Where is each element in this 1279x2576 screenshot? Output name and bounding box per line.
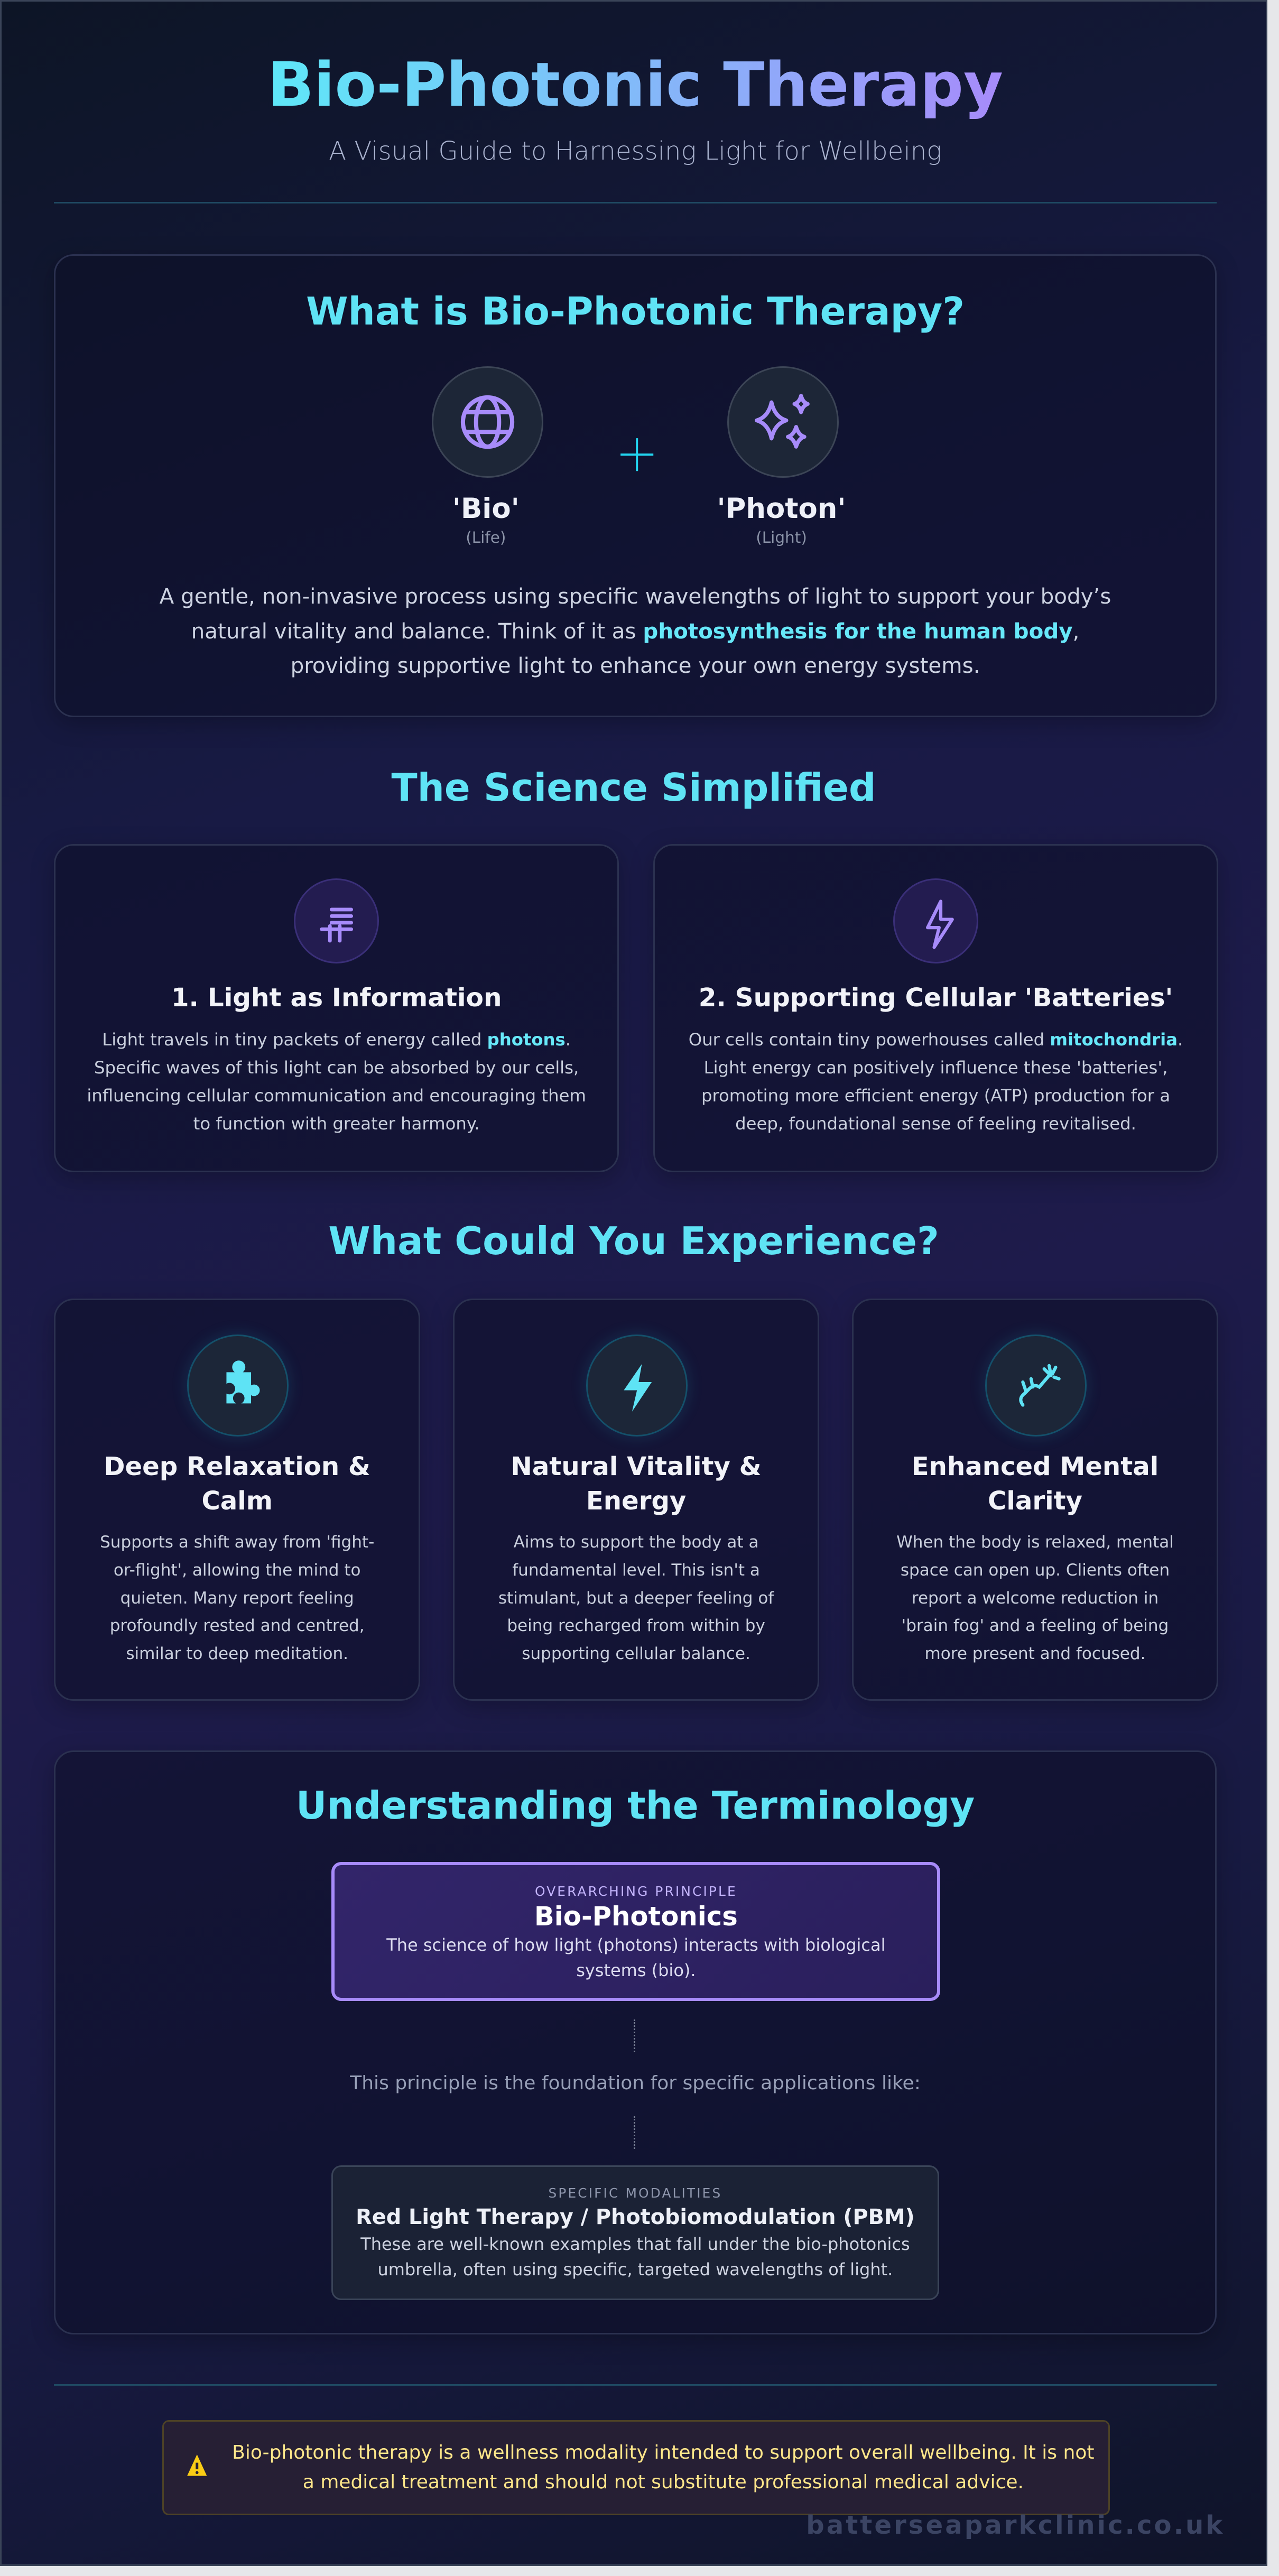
text: card 2: Our cells contain tiny powerhouses called mitochondria. Light energy can positively influence these 'batteries', promoting more efficient energy (ATP) production for a deep, foundational sense of feeling revitalised. <box>689 1030 1183 1134</box>
box: bio-photonics: OVERARCHING PRINCIPLE <box>535 1884 737 1899</box>
plus sign <box>620 438 653 471</box>
title: clarity: Enhanced Mental Clarity <box>912 1452 1158 1516</box>
text: vitality: Aims to support the body at a fundamental level. This isn't a stimulant, but a deeper feeling of being recharged from within by supporting cellular balance. <box>498 1533 774 1663</box>
box: modalities: SPECIFIC MODALITIES <box>549 2185 722 2201</box>
label: bio <box>452 493 520 546</box>
heading: science simplified: The Science Simplified <box>391 765 876 810</box>
title: Bio-Photonic Therapy <box>267 50 1003 121</box>
panel: terminology <box>54 1750 1217 2334</box>
card: clarity <box>852 1299 1218 1701</box>
watermark: batterseaparkclinic.co.uk <box>806 2510 1225 2540</box>
heading: experience: What Could You Experience? <box>328 1219 939 1263</box>
subtitle: A Visual Guide to Harnessing Light for Wellbeing <box>329 136 942 166</box>
disclaimer box <box>162 2420 1110 2515</box>
label: bio: (Life) <box>466 529 506 546</box>
heading: what is: What is Bio-Photonic Therapy? <box>306 289 965 333</box>
text: clarity: When the body is relaxed, mental space can open up. Clients often report a welcome reduction in 'brain fog' and a feeling of being more present and focused. <box>896 1533 1174 1663</box>
text: relaxation: Supports a shift away from 'fight-or-flight', allowing the mind to quieten. Many report feeling profoundly rested and centred, similar to deep meditation. <box>100 1533 374 1663</box>
label: bio: 'Bio' <box>452 493 520 525</box>
icon: clarity hand <box>985 1335 1087 1437</box>
disclaimer text: Bio-photonic therapy is a wellness modality intended to support overall wellbeing. It is not a medical treatment and should not substitute professional medical advice. <box>232 2442 1094 2493</box>
box: modalities: Red Light Therapy / Photobiomodulation (PBM) <box>356 2205 915 2229</box>
box: modalities: These are well-known examples that fall under the bio-photonics umbrella, often using specific, targeted wavelengths of light. <box>360 2234 910 2280</box>
title: card 1: 1. Light as Information <box>171 983 502 1013</box>
box: bio-photonics <box>331 1862 940 2001</box>
icon: lightning solid <box>586 1335 688 1437</box>
box: bio-photonics: Bio-Photonics <box>534 1901 738 1932</box>
description paragraph: A gentle, non-invasive process using specific wavelengths of light to support your body’s natural vitality and balance. Think of it as photosynthesis for the human body, providing supportive light to enhance your own energy systems. <box>160 584 1111 678</box>
box: modalities <box>331 2165 939 2300</box>
card: light as information <box>54 844 619 1172</box>
label: photon: (Light) <box>756 529 807 546</box>
card: cellular batteries <box>653 844 1218 1172</box>
label: photon <box>717 493 846 546</box>
icon: sparkles <box>727 366 839 478</box>
icon: information <box>294 878 379 963</box>
box: bio-photonics: The science of how light (photons) interacts with biological systems (bio). <box>386 1935 886 1980</box>
panel: what is <box>54 254 1217 717</box>
card: relaxation <box>54 1299 420 1701</box>
icon: globe <box>432 366 543 478</box>
connector dotted line 1 <box>634 2019 635 2052</box>
title: relaxation: Deep Relaxation & Calm <box>104 1452 370 1516</box>
text: card 1: Light travels in tiny packets of energy called photons. Specific waves of this light can be absorbed by our cells, influencing cellular communication and encouraging them to function with greater harmony. <box>87 1030 586 1134</box>
text: foundation: This principle is the foundation for specific applications like: <box>350 2072 921 2094</box>
heading: terminology: Understanding the Terminology <box>296 1783 975 1828</box>
title: card 2: 2. Supporting Cellular 'Batteries' <box>699 983 1173 1013</box>
connector dotted line 2 <box>634 2116 635 2149</box>
label: photon: 'Photon' <box>717 493 846 525</box>
icon: puzzle <box>187 1335 289 1437</box>
title: vitality: Natural Vitality & Energy <box>511 1452 762 1516</box>
card: vitality <box>453 1299 819 1701</box>
icon: warning <box>187 2454 207 2476</box>
icon: lightning outline <box>893 878 978 963</box>
